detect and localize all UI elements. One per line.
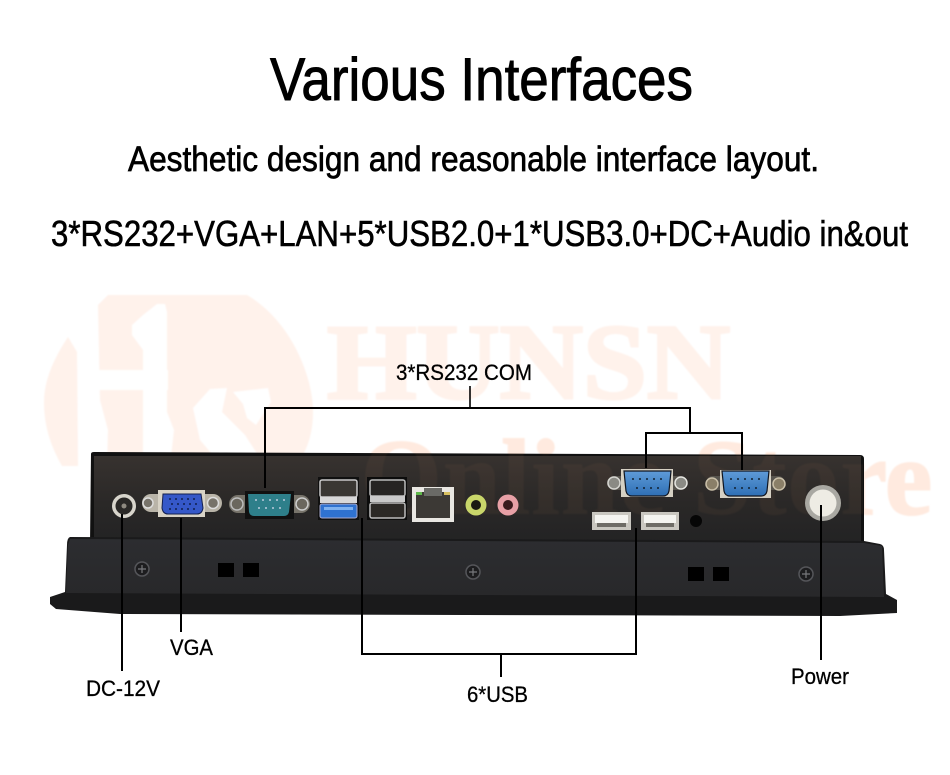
- watermark: HUNSN logo and store name: [44, 295, 932, 538]
- bezel screws: [135, 562, 813, 581]
- label: DC-12V: DC-12V: [86, 676, 160, 701]
- port: dual USB stack: [367, 477, 407, 520]
- label: VGA: VGA: [170, 635, 213, 660]
- callout: 3*RS232 COM bracket: [265, 386, 742, 488]
- port: RS232 blue right: [706, 470, 785, 498]
- port: audio in: [498, 494, 518, 516]
- port: audio out: [466, 494, 486, 516]
- hole: [690, 515, 702, 527]
- port: RS232 blue left: [607, 469, 687, 497]
- label: 3*RS232 COM: 3*RS232 COM: [396, 360, 532, 385]
- front bezel: [50, 537, 897, 616]
- infographic canvas: [44, 56, 931, 702]
- callout: DC-12V line: [121, 514, 123, 671]
- title: Various Interfaces: [270, 46, 693, 113]
- port: USB stack with USB 3.0: [318, 477, 359, 520]
- bezel vents: [218, 563, 729, 581]
- port: RS232 teal: [229, 491, 310, 519]
- device: rear view of panel PC: [50, 452, 897, 616]
- callout: VGA line: [180, 518, 182, 632]
- rear panel: [90, 452, 864, 541]
- callout: power line: [820, 505, 822, 660]
- watermark: HUNSN logo and store name: Online Store: [360, 419, 932, 538]
- label: Power: Power: [791, 664, 849, 689]
- label: 6*USB: 6*USB: [467, 682, 528, 707]
- port: VGA: [142, 490, 222, 517]
- port: USB A right: [641, 512, 679, 530]
- subtitle: Aesthetic design and reasonable interface layout.: [128, 140, 819, 179]
- watermark: HUNSN logo and store name: HUNSN: [327, 304, 730, 422]
- port: LAN: [412, 487, 454, 522]
- port: DC jack: [112, 494, 136, 518]
- callout: 6*USB bracket: [362, 518, 636, 677]
- port: USB A left: [592, 512, 631, 530]
- power button: [805, 485, 841, 521]
- rear panel: Online Store: [360, 419, 932, 538]
